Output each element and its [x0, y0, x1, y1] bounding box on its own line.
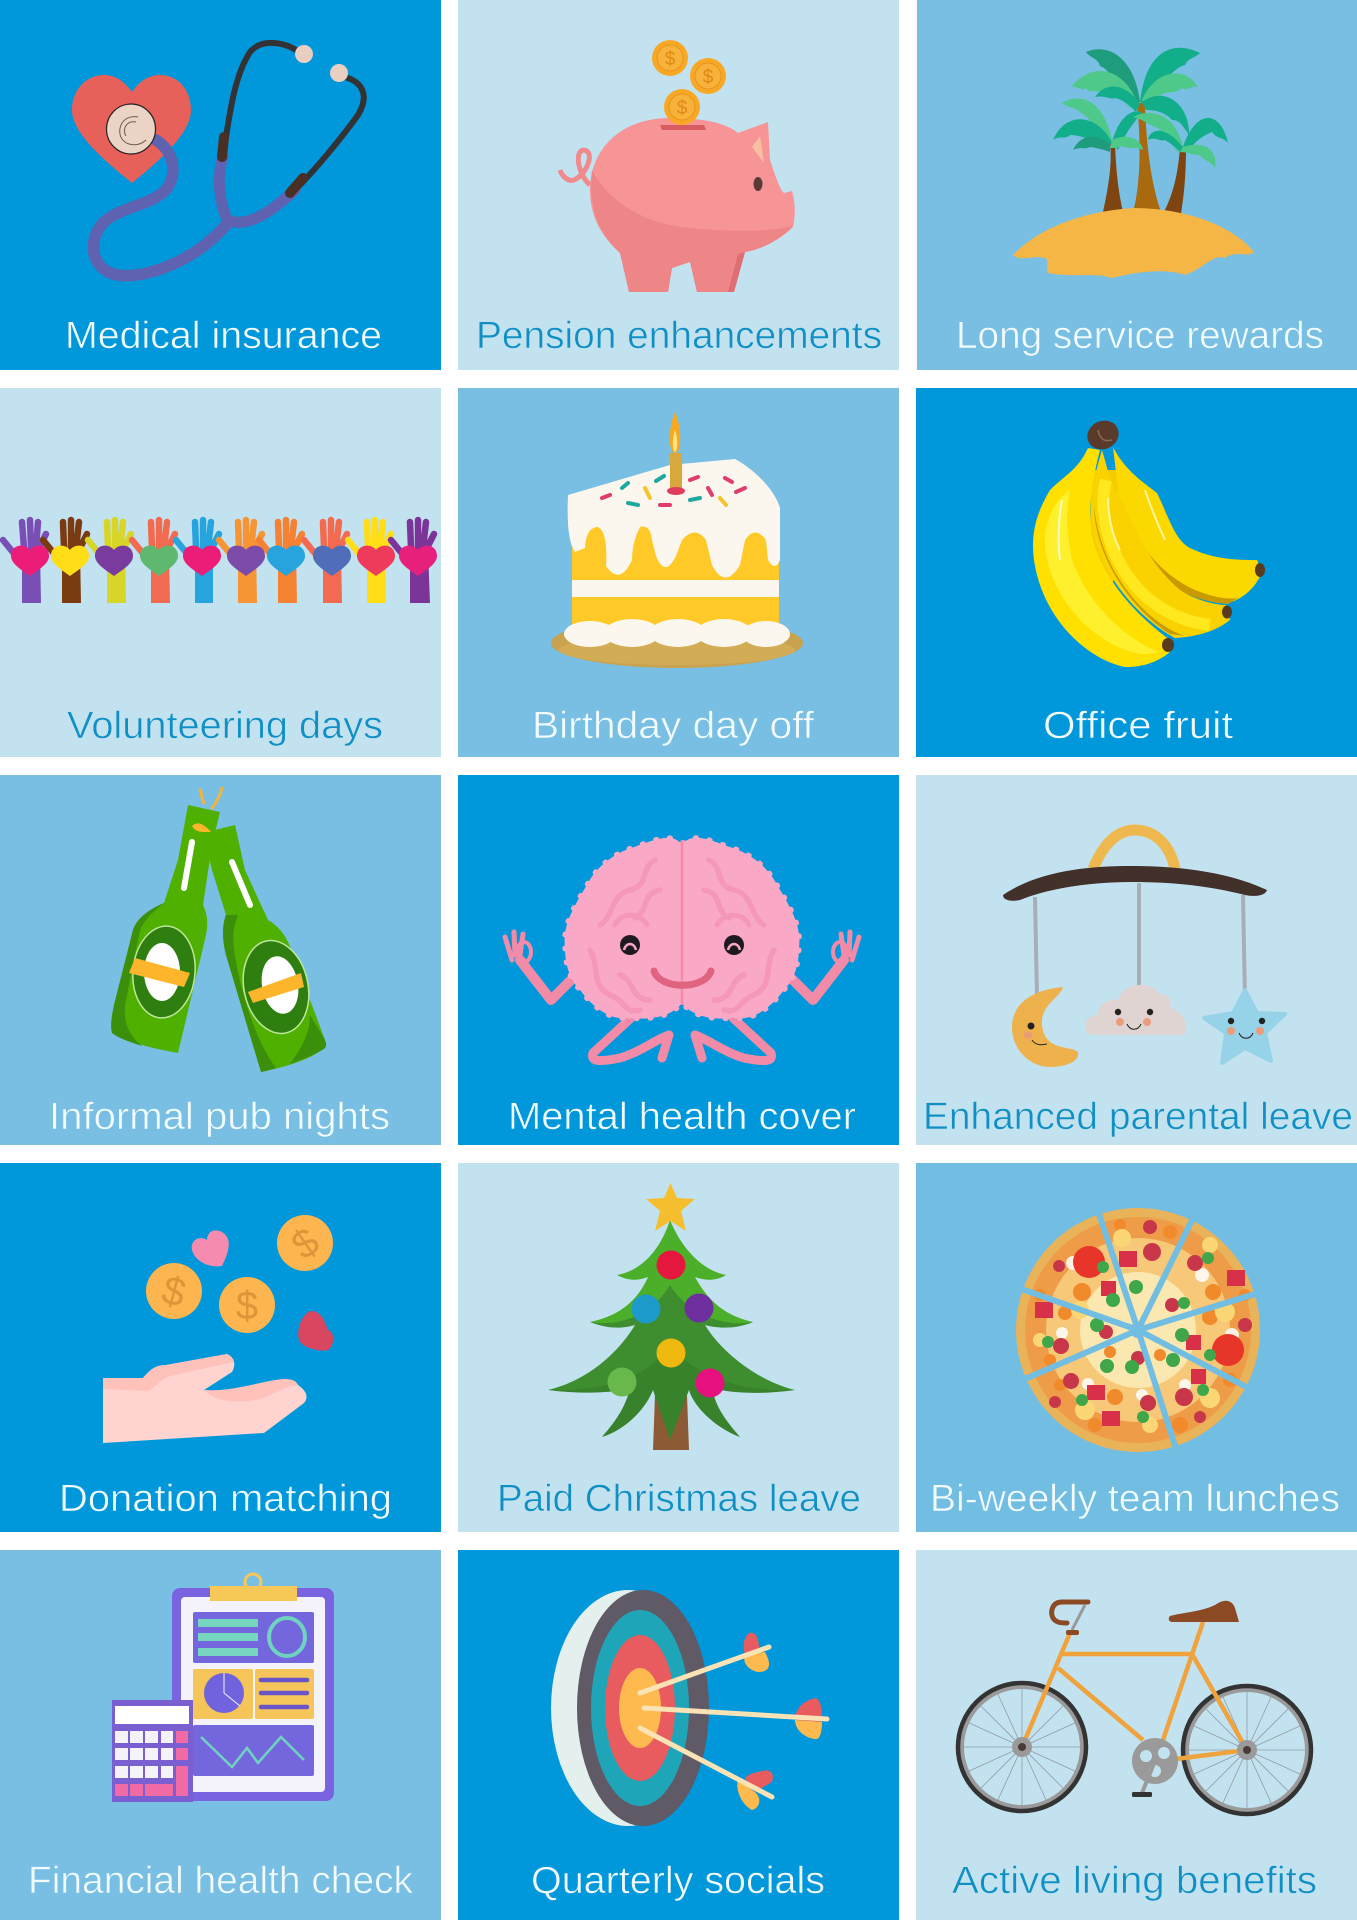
label: Volunteering days: Volunteering days [67, 705, 383, 747]
panel: volunteering days [0, 388, 441, 757]
label: Enhanced parental leave: Enhanced parental leave [923, 1096, 1353, 1138]
icon: baby crib mobile [1003, 830, 1285, 1067]
icon: hand with coins and hearts: $ [284, 1219, 327, 1268]
icon: clipboard and calculator [112, 1574, 334, 1802]
label: Active living benefits: Active living benefits [952, 1860, 1317, 1902]
panel: paid christmas leave [458, 1163, 899, 1532]
icon: hand with coins and hearts [103, 1215, 333, 1443]
icon: meditating brain character [505, 838, 859, 1061]
icon: hand with coins and hearts: $ [236, 1284, 258, 1328]
panel: office fruit [916, 388, 1357, 757]
label: Birthday day off: Birthday day off [532, 705, 814, 747]
panel: informal pub nights [0, 775, 441, 1145]
label: Donation matching: Donation matching [59, 1478, 392, 1520]
label: Bi-weekly team lunches: Bi-weekly team lunches [930, 1478, 1340, 1520]
panel: mental health cover [458, 775, 899, 1145]
icon: row of raised hands with hearts [3, 520, 437, 603]
panel: donation matching [0, 1163, 441, 1532]
icon: sliced pizza [1010, 1208, 1274, 1452]
icon: piggy bank with coins [560, 40, 795, 292]
icon: piggy bank with coins: $ [665, 49, 676, 70]
label: Informal pub nights: Informal pub nights [49, 1096, 390, 1138]
icon: slice of birthday cake [551, 412, 803, 668]
icon: bicycle [958, 1601, 1311, 1814]
panel: financial health check [0, 1550, 441, 1920]
label: Quarterly socials: Quarterly socials [531, 1860, 825, 1902]
icon: two clinking beer bottles [111, 788, 326, 1072]
label: Office fruit: Office fruit [1043, 705, 1233, 747]
icon: palm tree island [1013, 48, 1254, 278]
icon: piggy bank with coins: $ [677, 98, 688, 119]
panel: quarterly socials [458, 1550, 899, 1920]
icon: hand with coins and hearts: $ [157, 1268, 190, 1316]
panel: pension enhancements [458, 0, 899, 370]
panel: long service rewards [917, 0, 1357, 370]
icon: decorated christmas tree [548, 1183, 795, 1450]
label: Pension enhancements: Pension enhancements [476, 315, 882, 357]
panel: active living benefits [916, 1550, 1357, 1920]
panel: enhanced parental leave [916, 775, 1357, 1145]
label: Paid Christmas leave: Paid Christmas leave [497, 1478, 861, 1520]
label: Long service rewards: Long service rewards [956, 315, 1324, 357]
icon: piggy bank with coins: $ [703, 67, 714, 88]
label: Medical insurance: Medical insurance [65, 315, 382, 357]
panel: bi-weekly team lunches [916, 1163, 1357, 1532]
icon: bunch of bananas [1033, 416, 1265, 667]
icon: archery target with arrows [551, 1590, 827, 1826]
label: Mental health cover: Mental health cover [508, 1096, 856, 1138]
icon: stethoscope on heart [72, 43, 364, 276]
label: Financial health check: Financial health check [28, 1860, 414, 1902]
panel: birthday day off [458, 388, 899, 757]
panel: medical insurance [0, 0, 441, 370]
